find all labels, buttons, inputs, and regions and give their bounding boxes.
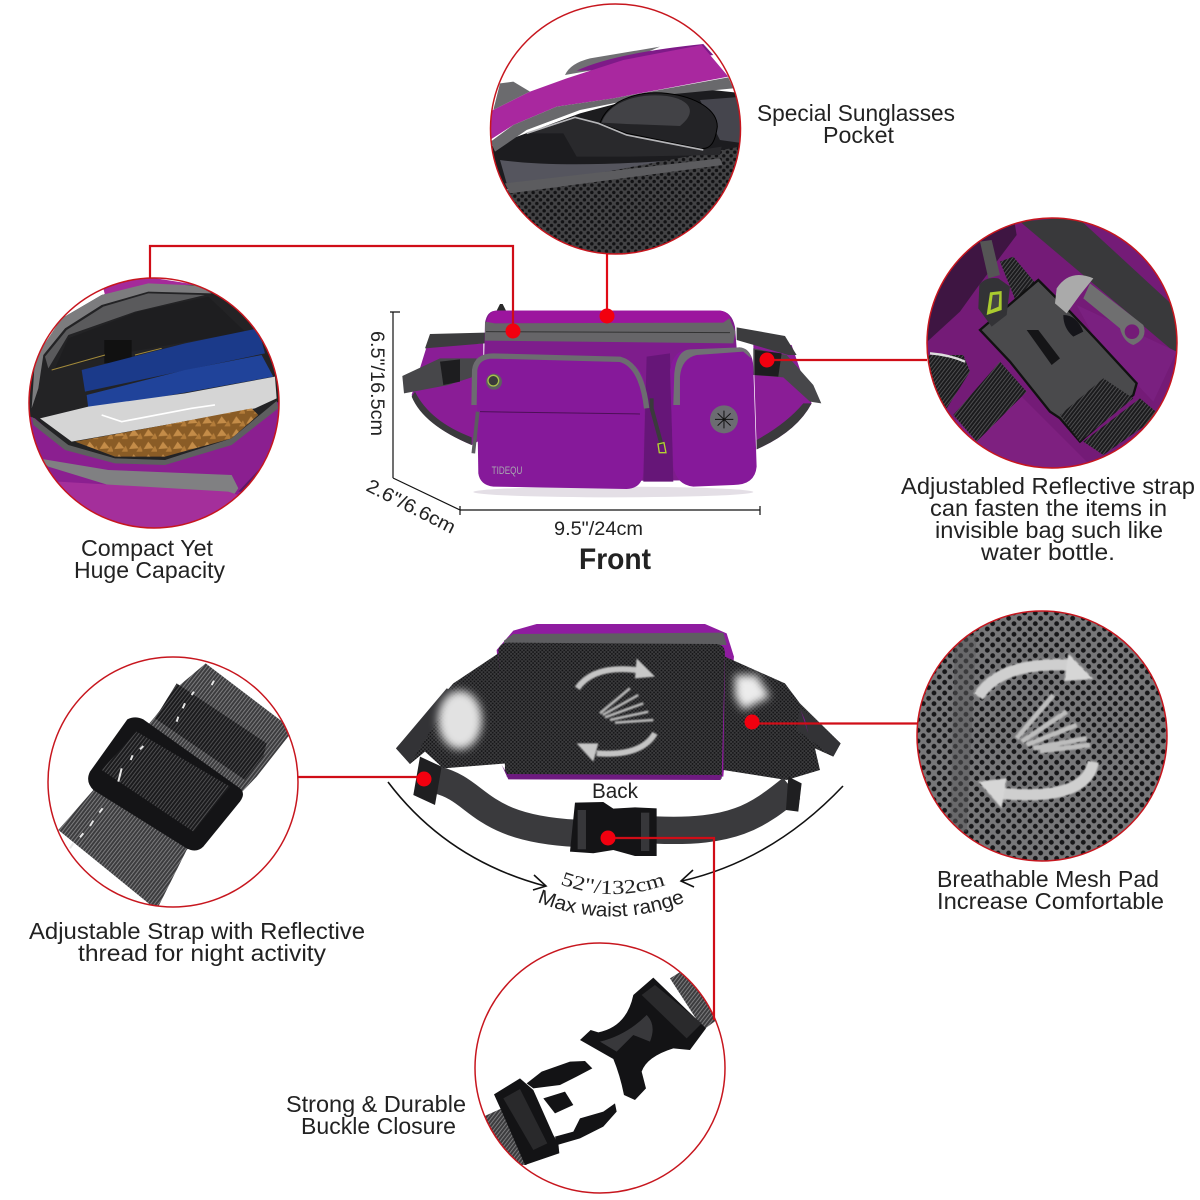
buckle upper arm [527, 1061, 592, 1088]
buckle lower arm [555, 1103, 617, 1145]
side-release buckle [980, 280, 1137, 442]
connector: strap adjuster [298, 772, 432, 786]
airflow swirl [978, 653, 1093, 808]
left wing mesh [396, 653, 507, 768]
connector: buckle [600, 830, 714, 1020]
callout circle: adjustable strap with reflective thread [48, 657, 298, 910]
callout circle: breathable mesh pad [916, 610, 1168, 862]
callout circle: compact yet huge capacity [25, 275, 285, 535]
photo: front view of purple waist bag [402, 304, 821, 497]
ventilation blur [438, 675, 770, 749]
whistle port [710, 405, 738, 433]
connector: mesh pad [744, 714, 918, 730]
callout circle: sunglasses pocket [490, 4, 747, 263]
zipper pull [1083, 283, 1145, 345]
label: adjustable strap: Adjustable Strap with Reflective [29, 918, 365, 944]
label: capacity: Huge Capacity [74, 557, 225, 583]
waist range label: 52"/132cm [562, 872, 666, 894]
label: capacity [74, 535, 225, 583]
connector: sunglasses pocket [600, 254, 614, 324]
label: mesh pad: Increase Comfortable [937, 888, 1164, 914]
eyelet [486, 374, 502, 390]
label: adjustable strap [29, 918, 365, 966]
label: adjustable strap: thread for night activity [78, 940, 327, 966]
heading: Back: Back [592, 780, 638, 803]
waist range caption: Max waist range [538, 890, 684, 917]
connector: reflective strap [760, 352, 927, 368]
connector: main compartment [150, 246, 520, 338]
waist belt [437, 780, 792, 833]
right wing mesh [723, 657, 841, 780]
kibble [75, 408, 258, 457]
slide buckle [88, 717, 243, 850]
waist range left arrow [388, 782, 546, 890]
label: reflective strap [901, 473, 1195, 565]
buckle female half [483, 1108, 527, 1165]
sunglasses frame [527, 117, 722, 157]
purple lower pocket [30, 402, 278, 495]
food bag plastic [40, 377, 277, 442]
callout circle: buckle closure [474, 942, 726, 1194]
size dimension lines [390, 312, 760, 515]
dimension: height: 6.5"/16.5cm [366, 331, 387, 436]
whistle toggle [978, 278, 1010, 327]
callout circle: adjustable reflective strap [920, 215, 1187, 475]
central buckle [570, 802, 657, 856]
brand logo: TIDEQU [492, 465, 522, 477]
photo: back view of waist bag with belt [396, 624, 841, 856]
dimension: depth: 2.6"/6.6cm [363, 476, 459, 538]
label: mesh pad: Breathable Mesh Pad [937, 866, 1159, 892]
label: reflective strap: invisible bag such like [935, 517, 1163, 543]
label: mesh pad [937, 866, 1164, 914]
label: reflective strap: Adjustabled Reflective strap [901, 473, 1195, 499]
reflective dashes [70, 681, 214, 848]
blue towels [82, 328, 265, 392]
strap adjusters [413, 757, 802, 812]
heading: Front: Front [579, 543, 651, 576]
central mesh pad [498, 643, 725, 779]
label: capacity: Compact Yet [81, 535, 214, 561]
buckle male half [670, 972, 715, 1028]
airflow arrows [577, 658, 655, 762]
waist range right arrow [681, 786, 843, 887]
label: reflective strap: water bottle. [980, 539, 1115, 565]
label: sunglasses pocket: Pocket [823, 122, 895, 148]
buckle centre stub [543, 1092, 573, 1113]
label: buckle: Buckle Closure [301, 1113, 456, 1139]
label: reflective strap: can fasten the items in [930, 495, 1167, 521]
label: buckle [286, 1091, 466, 1139]
label: sunglasses pocket [757, 100, 955, 148]
dimension: width: 9.5"/24cm [554, 519, 643, 540]
label: sunglasses pocket: Special Sunglasses [757, 100, 955, 126]
sunglasses lens [600, 93, 717, 149]
label: buckle: Strong & Durable [286, 1091, 466, 1117]
